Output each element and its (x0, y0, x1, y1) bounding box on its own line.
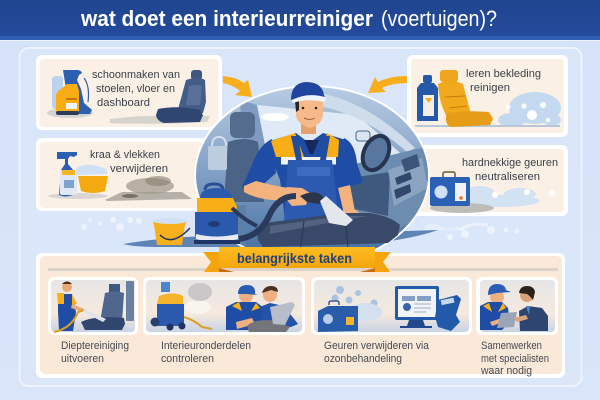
specialisten text: waar nodig (480, 365, 532, 377)
ozonbehandeling text: Geuren verwijderen via (324, 340, 430, 352)
icon: yellow seat (438, 70, 493, 127)
icon: cleaning products (47, 70, 93, 118)
thumbnail: interieuronderdelen (143, 277, 305, 335)
car seat cushion (258, 213, 400, 251)
leren text (466, 68, 541, 94)
decorative foam bubbles left (81, 217, 142, 231)
vacuum cleaner (194, 184, 257, 244)
hose (239, 196, 296, 239)
schoonmaken text: dashboard (97, 97, 150, 109)
dieptereiniging text: uitvoeren (61, 353, 104, 365)
icon: dark car seat (110, 70, 210, 124)
interieuronderdelen text (161, 340, 251, 365)
worker (242, 82, 368, 224)
cleaning tool (300, 192, 353, 226)
specialist (520, 288, 534, 302)
panel: belangrijkste taken (36, 253, 565, 378)
banner: belangrijkste taken (237, 251, 352, 266)
roof band (320, 93, 415, 152)
icon: spray and bucket (48, 152, 108, 199)
mechanic (239, 289, 253, 303)
geuren text (462, 157, 558, 183)
thumbnail: specialisten (476, 277, 558, 335)
bubbles (332, 286, 382, 321)
clipboard (497, 312, 517, 328)
terminal (435, 295, 461, 331)
arrow: left card to worker (223, 76, 252, 97)
monitor (395, 286, 439, 320)
interieuronderdelen text: controleren (161, 353, 214, 365)
outer frame (20, 48, 582, 386)
part (247, 320, 290, 332)
vacuum (161, 282, 170, 292)
panel: stoelen schoonmaken (36, 55, 222, 130)
windshield (257, 105, 400, 164)
specialisten text: met specialisten (481, 353, 549, 365)
ozone box (329, 301, 339, 305)
icon: bottle (417, 75, 438, 121)
icon: foam cloud (460, 186, 555, 207)
geuren text: hardnekkige geuren (462, 157, 558, 169)
colleague (263, 288, 277, 302)
icon: ozone generator (430, 172, 494, 213)
seat (109, 284, 120, 293)
interieuronderdelen text: Interieuronderdelen (161, 340, 251, 352)
left sleeve (242, 139, 276, 191)
icon: foam (415, 92, 561, 127)
neck and head (301, 120, 316, 134)
central oval scene (194, 85, 430, 251)
haze (185, 300, 211, 314)
arrow: right card to worker (368, 76, 407, 93)
dirt stain (105, 176, 192, 201)
schoonmaken text: stoelen, vloer en (96, 83, 175, 95)
thumbnail: dieptereiniging (48, 277, 138, 335)
schoonmaken text (92, 69, 180, 109)
specialisten text (480, 340, 549, 377)
torso (270, 133, 348, 220)
leren text: leren bekleding (466, 68, 541, 80)
header band (0, 0, 600, 41)
bucket (153, 218, 190, 245)
banner (203, 247, 391, 272)
thumbnail: ozonbehandeling (311, 277, 472, 335)
yellow shoulders (271, 133, 339, 157)
ozonbehandeling text (324, 340, 430, 365)
cap (291, 82, 325, 100)
right sleeve (337, 138, 363, 188)
specialisten text: Samenwerken (481, 340, 542, 352)
face (302, 107, 317, 109)
worker (62, 282, 72, 292)
worker (490, 290, 504, 304)
leren text: reinigen (470, 82, 510, 94)
panel: kraa en vlekken (36, 138, 222, 211)
steering wheel (360, 134, 392, 172)
mirror (356, 131, 370, 141)
title: wat doet een interieurreiniger (80, 6, 373, 31)
arms (244, 181, 291, 200)
title suffix: (voertuigen)? (381, 6, 497, 31)
floor shadow (123, 230, 438, 247)
bib (284, 160, 338, 222)
panel: leren bekleding (407, 55, 568, 137)
back seat (208, 112, 264, 247)
dashboard (357, 148, 428, 228)
decorative foam bubbles right (425, 224, 520, 240)
schoonmaken text: schoonmaken van (92, 69, 180, 81)
dieptereiniging text (61, 340, 129, 365)
kraa text (90, 149, 168, 175)
dieptereiniging text: Dieptereiniging (61, 340, 129, 352)
panel: geuren neutraliseren (407, 145, 568, 216)
side pillar (240, 102, 265, 150)
kraa text: kraa & vlekken (90, 149, 160, 161)
kraa text: verwijderen (110, 163, 168, 175)
geuren text: neutraliseren (475, 171, 540, 183)
ozonbehandeling text: ozonbehandeling (324, 353, 402, 365)
hair (295, 100, 299, 112)
